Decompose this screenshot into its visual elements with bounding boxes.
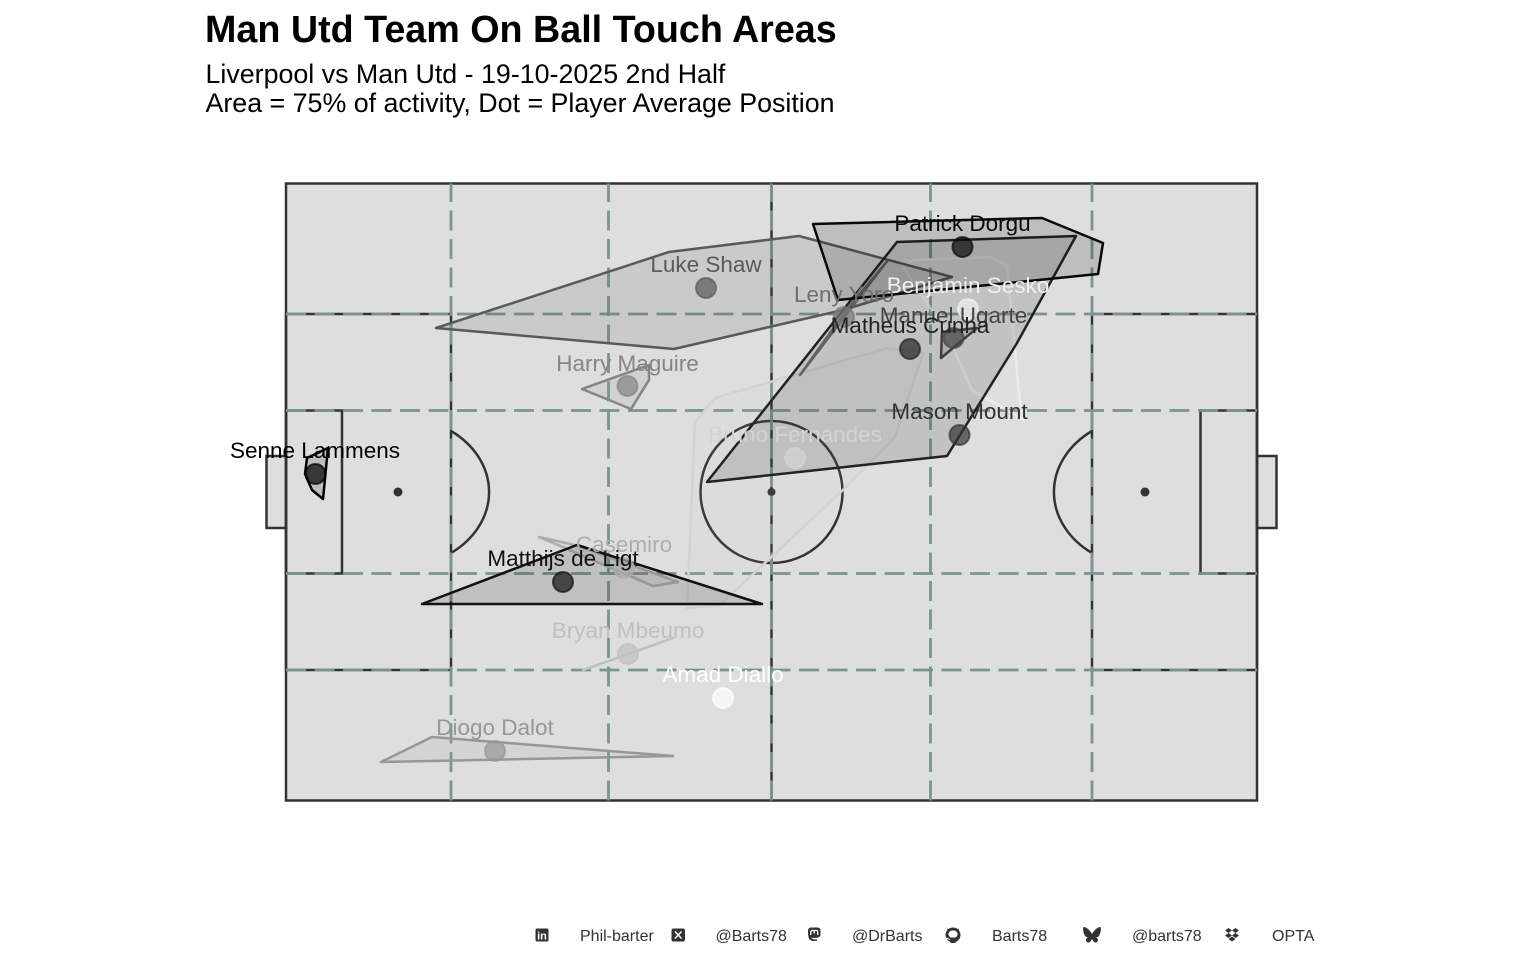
player labels: Patrick Dorgu <box>894 211 1031 236</box>
icon: linkedin <box>536 928 548 942</box>
icon: mastodon <box>808 928 820 941</box>
player labels: Harry Maguire <box>556 351 699 376</box>
player labels: Mason Mount <box>891 399 1028 424</box>
player labels: Senne Lammens <box>230 438 400 463</box>
area: Luke Shaw <box>436 236 952 349</box>
player labels: Matthijs de Ligt <box>487 546 639 571</box>
text: bluesky handle: @barts78 <box>1132 928 1202 945</box>
player labels: Bruno Fernandes <box>708 422 882 447</box>
area: Casemiro <box>539 537 678 586</box>
subtitle <box>206 59 835 118</box>
icon: x <box>672 928 685 942</box>
player labels: Luke Shaw <box>650 252 762 277</box>
subtitle: Area = 75% of activity, Dot = Player Average Position <box>206 88 835 118</box>
icon: bluesky butterfly <box>1083 927 1101 943</box>
area: Leny Yoro <box>800 260 888 375</box>
icon: github <box>946 928 960 943</box>
player labels: Bryan Mbeumo <box>552 618 704 643</box>
icon: linkedin: in <box>537 930 547 942</box>
player dots <box>306 237 978 761</box>
text: mastodon handle: @DrBarts <box>852 928 922 945</box>
area: Matthijs de Ligt <box>422 545 762 604</box>
area: Harry Maguire <box>582 365 649 409</box>
zone grid <box>286 184 1257 800</box>
subtitle: Liverpool vs Man Utd - 19-10-2025 2nd Half <box>206 59 726 89</box>
text: linkedin handle: Phil-barter <box>580 928 654 945</box>
player labels: Diogo Dalot <box>436 715 555 740</box>
touch areas <box>305 218 1103 762</box>
player labels <box>230 211 1049 740</box>
text: github handle: Barts78 <box>992 928 1047 945</box>
footer credits <box>536 927 1315 945</box>
player labels: Casemiro <box>576 532 672 557</box>
area: Bryan Mbeumo <box>583 638 673 670</box>
area: Diogo Dalot <box>381 737 673 762</box>
area: Senne Lammens <box>305 448 328 499</box>
area: Patrick Dorgu <box>813 218 1103 300</box>
area: Bruno Fernandes <box>687 348 923 608</box>
area: Mason Mount and Matheus Cunha <box>707 236 1076 482</box>
player labels: Manuel Ugarte <box>880 303 1027 328</box>
player labels: Amad Diallo <box>662 662 784 687</box>
text: x handle: @Barts78 <box>716 928 787 945</box>
player labels: Leny Yoro <box>794 282 894 307</box>
area: Benjamin Sesko <box>903 257 1024 420</box>
icon: dropbox <box>1225 928 1239 942</box>
area: Manuel Ugarte <box>941 328 977 358</box>
title: Man Utd Team On Ball Touch Areas <box>205 8 837 50</box>
player labels: Matheus Cunha <box>831 313 990 338</box>
text: data source: OPTA <box>1272 928 1315 945</box>
player labels: Benjamin Sesko <box>887 273 1049 298</box>
pitch <box>266 184 1276 800</box>
